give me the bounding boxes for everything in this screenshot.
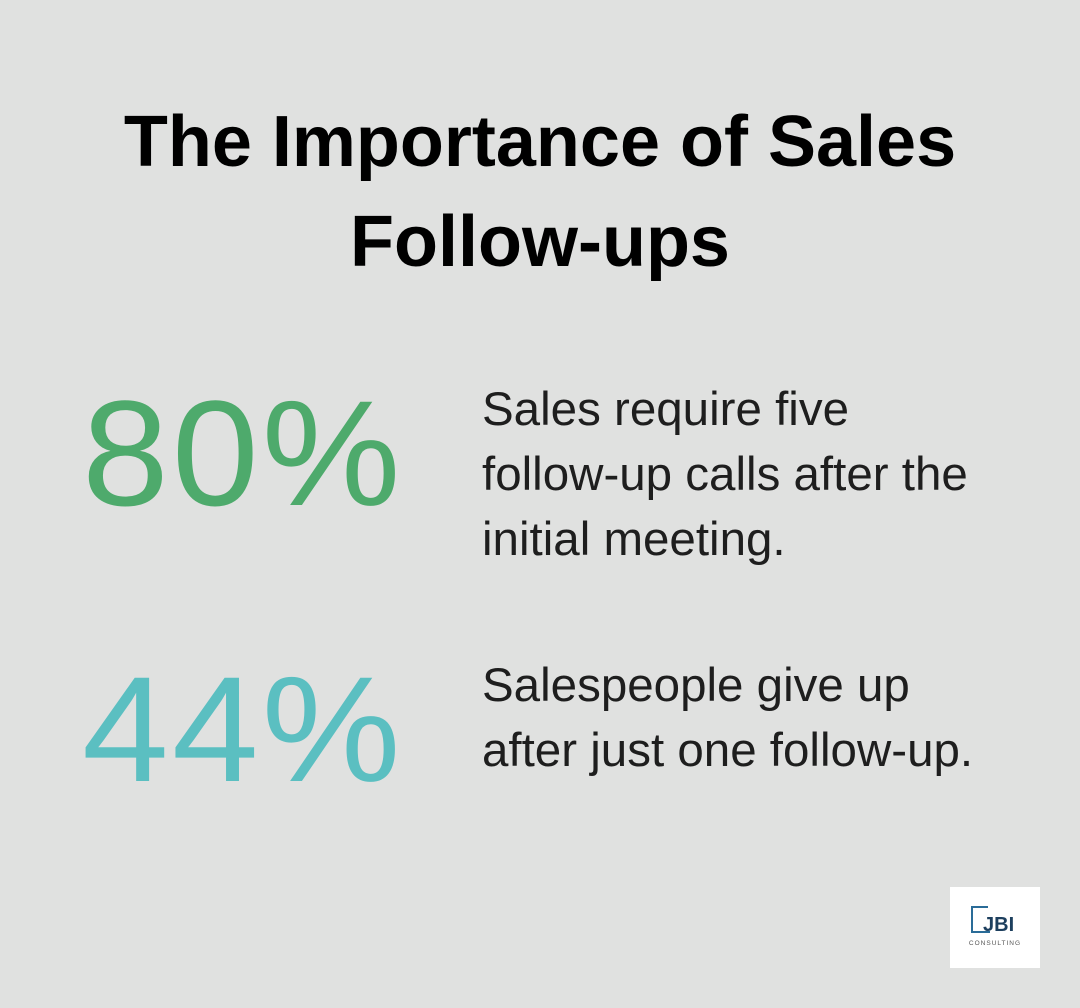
stat: 80%: 80%: [82, 369, 404, 537]
text: 44% description: [482, 659, 973, 777]
text: 44% description: after just one follow-up.: [482, 724, 973, 777]
logo: JBI Consulting: CONSULTING: [969, 940, 1021, 947]
text: 44% description: Salespeople give up: [482, 659, 910, 712]
text: 80% description: initial meeting.: [482, 513, 786, 566]
title: The Importance of Sales: [124, 102, 956, 182]
title: [124, 102, 956, 282]
text: 80% description: [482, 383, 968, 566]
text: 80% description: Sales require five: [482, 383, 849, 436]
logo: JBI Consulting: [950, 887, 1040, 968]
logo: JBI Consulting: JBI: [983, 914, 1014, 936]
stat: 44%: 44%: [82, 645, 404, 813]
title: Follow-ups: [350, 202, 730, 282]
text: 80% description: follow-up calls after the: [482, 448, 968, 501]
